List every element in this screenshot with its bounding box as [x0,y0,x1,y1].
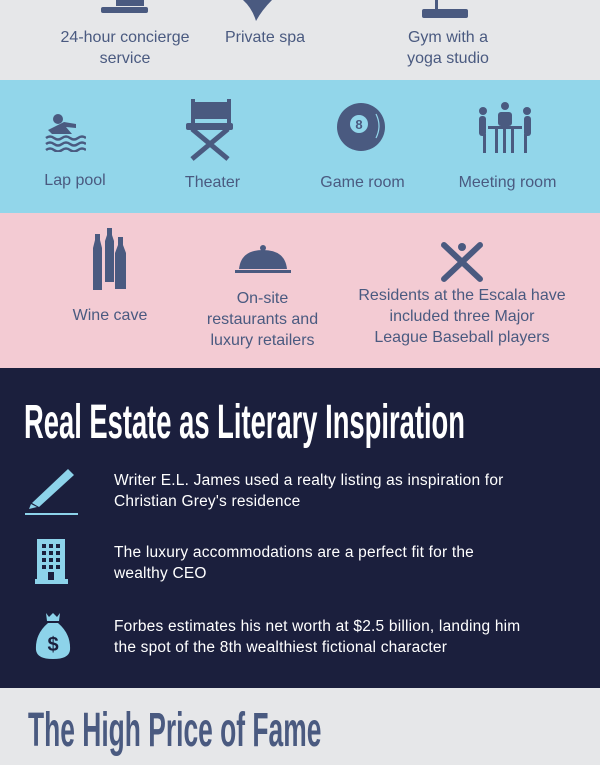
icon: swimmer [45,114,86,152]
icon: 8 ball: 8 [355,117,363,132]
row: luxury [35,539,474,584]
label: restaurants: restaurants and [207,311,318,328]
icon: 8 ball [337,103,385,151]
icon: baseball bats [441,242,483,282]
row: forbes [36,613,520,659]
icon: money bag [36,613,70,659]
icon: building [35,539,68,584]
label: wine cave: Wine cave [73,307,147,324]
icon: spa [243,0,272,21]
icon: gym [422,0,468,18]
text: luxury: The luxury accommodations are a perfect fit for the wealthy CEO [114,544,474,582]
label: concierge: 24-hour concierge [61,29,189,46]
row: writer [25,469,504,515]
text: forbes [114,618,520,656]
panel: top amenities [0,0,600,80]
panel: blue amenities [0,80,600,213]
icon: pen [25,469,78,515]
icon: wine bottles [93,228,126,290]
icon: concierge bell base [101,0,148,13]
label: lap pool: Lap pool [44,172,106,189]
label: restaurants [207,290,318,349]
icon: director chair [186,99,233,161]
heading: literary inspiration: Real Estate as Literary Inspiration [24,396,465,449]
text: forbes: the spot of the 8th wealthiest fictional character [114,639,447,656]
text: forbes: Forbes estimates his net worth at $2.5 billion, landing him [114,618,520,635]
label: concierge [61,29,189,67]
label: gym: yoga studio [407,50,489,67]
heading: high price of fame: The High Price of Fame [28,704,321,757]
label: baseball [358,287,566,346]
label: gym: Gym with a [408,29,488,46]
icon: money bag: $ [47,634,59,656]
label: baseball: League Baseball players [374,329,550,346]
label: theater: Theater [185,174,240,191]
text: writer: Writer E.L. James used a realty listing as inspiration for Christian Grey's residence [114,472,504,510]
label: meeting room: Meeting room [459,174,556,191]
label: restaurants: On-site [237,290,288,307]
label: restaurants: luxury retailers [210,332,315,349]
label: gym [407,29,489,67]
icon: cloche [235,245,291,273]
label: game room: Game room [320,174,405,191]
label: spa: Private spa [225,29,305,46]
panel: literary inspiration [0,368,600,688]
panel: pink amenities [0,213,600,368]
label: baseball: Residents at the Escala have [358,287,566,304]
label: baseball: included three Major [390,308,534,325]
icon: meeting [479,102,531,153]
label: concierge: service [100,50,150,67]
